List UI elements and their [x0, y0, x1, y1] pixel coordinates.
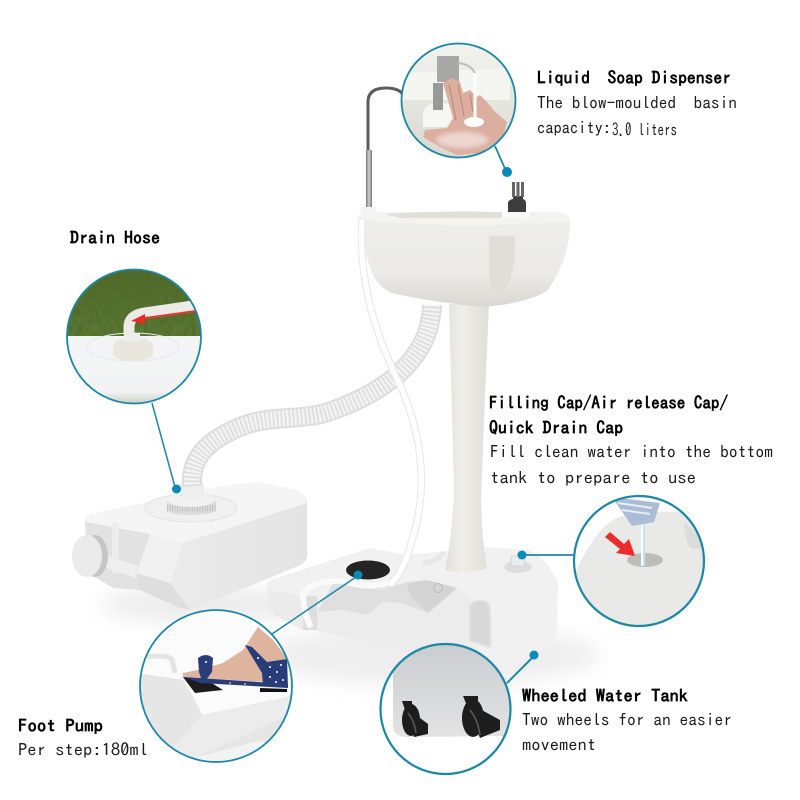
label: filling cap: tank to prepare to use: [490, 470, 696, 487]
basin: [358, 212, 570, 307]
label: wheeled water tank: Wheeled Water Tank: [522, 688, 689, 705]
white water hose: [361, 220, 421, 585]
label: drain hose: Drain Hose: [70, 230, 160, 247]
front face: [313, 588, 495, 669]
corrugated drain hose: [192, 305, 432, 486]
side groove: [470, 600, 491, 648]
tank symbol: [434, 584, 442, 592]
faucet: [361, 88, 405, 217]
drain tank: [72, 482, 307, 610]
pipe loop: [303, 581, 393, 627]
label: filling cap: Fill clean water into the bottom: [490, 444, 773, 461]
cutout basin: [317, 580, 457, 615]
label: filling cap: Quick Drain Cap: [489, 420, 623, 437]
label: liquid soap dispenser: 3.0 liters: [612, 122, 677, 139]
label: filling cap: Filling Cap/Air release Cap/: [489, 395, 729, 412]
label: wheeled water tank: movement: [522, 737, 596, 754]
left face: [86, 522, 150, 590]
drain cap: [145, 484, 237, 522]
callout: liquid soap dispenser: [400, 44, 516, 177]
floor shadows: [100, 587, 600, 685]
label: wheeled water tank: [522, 688, 732, 754]
soap pump: [502, 182, 530, 218]
callout: drain hose: [66, 268, 202, 494]
handle and knob: [72, 535, 138, 578]
label: foot pump: [18, 718, 148, 759]
top face: [85, 482, 306, 543]
base water tank: [267, 547, 558, 670]
label: foot pump: Per step:180ml: [18, 742, 148, 759]
label: liquid soap dispenser: capacity:: [537, 120, 611, 137]
label: liquid soap dispenser: Liquid Soap Dispenser: [537, 70, 731, 87]
label: filling cap: [489, 395, 773, 487]
callout: foot pump: [138, 570, 362, 770]
label: wheeled water tank: Two wheels for an easier: [522, 712, 732, 729]
callout: filling cap: [518, 496, 712, 630]
left end: [267, 590, 303, 630]
label: liquid soap dispenser: [537, 70, 737, 139]
side pipe: [423, 552, 444, 563]
label: liquid soap dispenser: The blow-moulded basin: [537, 95, 737, 112]
label: foot pump: Foot Pump: [18, 718, 103, 735]
foot pump pedal: [346, 560, 390, 580]
front face: [170, 503, 307, 609]
callout: wheeled water tank: [380, 640, 538, 774]
fill cap: [504, 556, 532, 573]
pedestal column: [445, 304, 489, 573]
